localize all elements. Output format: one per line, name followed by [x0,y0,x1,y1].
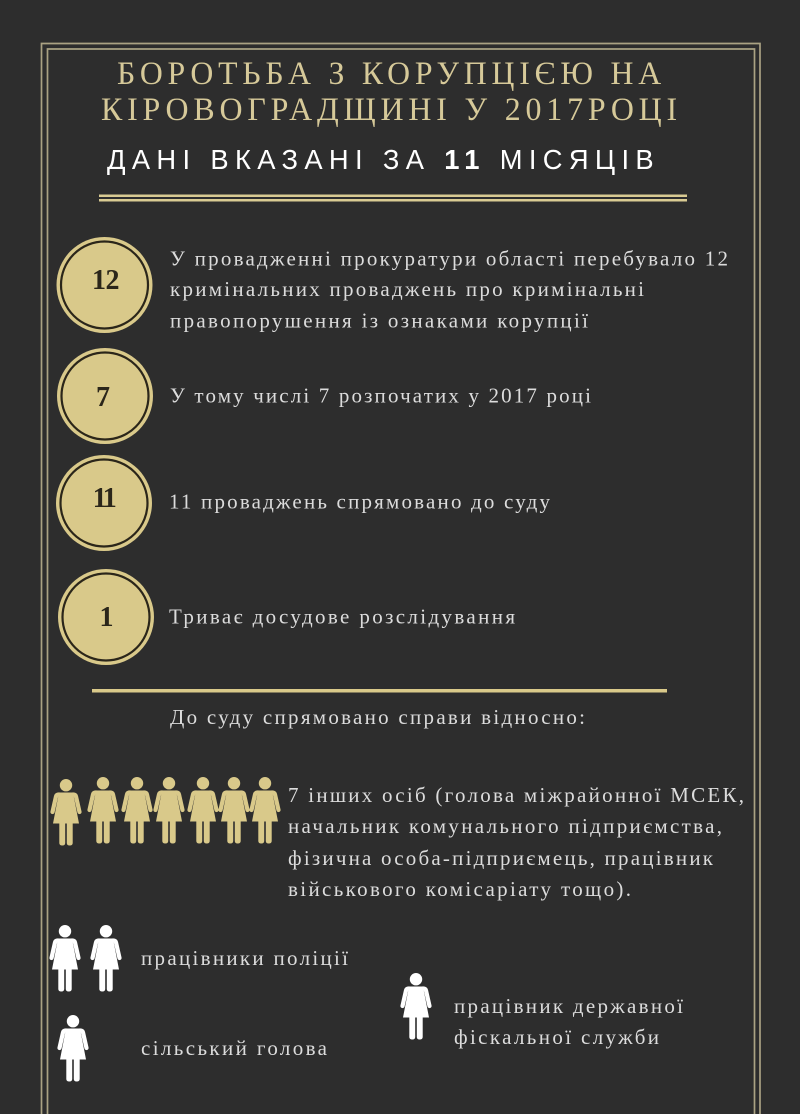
subtitle: ДАНІ ВКАЗАНІ ЗА 11 МІСЯЦІВ [107,144,660,175]
text: 12 proceedings: правопорушення із ознаками корупції [170,308,588,332]
icon: white figure (tax service) [402,973,430,1040]
stat: 1 [58,569,154,665]
text: 7 other persons: військового комісаріату тощо). [288,877,631,901]
text: 7 other persons: начальник комунального підприємства, [288,814,722,838]
stat: 12 [56,237,152,333]
divider rule [92,689,667,692]
stat: 11: 11 [93,483,116,514]
stat: 11 [56,455,152,551]
text: village head: сільський голова [141,1036,328,1060]
text: tax service employee [454,994,683,1049]
text: police officers: працівники поліції [141,946,348,970]
text: 7 other persons: фізична особа-підприємець, працівник [288,846,714,870]
stat: 1: 1 [100,602,114,633]
text: 7 other persons [288,783,744,901]
text: tax service employee: працівник державної [454,994,683,1018]
text: 7 other persons: 7 інших осіб (голова міжрайонної МСЕК, [288,783,744,807]
icons: seven gold figures [52,777,278,846]
double rule under header [99,194,687,202]
text: 12 proceedings: У провадженні прокуратури області перебувало 12 [170,246,728,270]
section heading: До суду спрямовано справи відносно: [170,705,585,729]
text: tax service employee: фіскальної служби [454,1025,659,1049]
text: pre-trial investigation: Триває досудове розслідування [169,604,515,628]
text: 7 started: У тому числі 7 розпочатих у 2017 році [170,384,591,408]
title: БОРОТЬБА З КОРУПЦІЄЮ НА [117,56,666,92]
text: 12 proceedings: кримінальних проваджень про кримінальні [170,277,644,301]
stat: 7 [57,348,153,444]
title [101,56,682,128]
text: 12 proceedings [170,246,728,332]
stat: 12: 12 [92,265,119,296]
title: КІРОВОГРАДЩИНІ У 2017РОЦІ [101,92,682,128]
stat: 7: 7 [96,382,110,413]
text: 11 sent to court: 11 проваджень спрямовано до суду [169,490,550,514]
icons: two white figures (police) [52,925,120,992]
icon: white figure (village head) [60,1015,86,1082]
